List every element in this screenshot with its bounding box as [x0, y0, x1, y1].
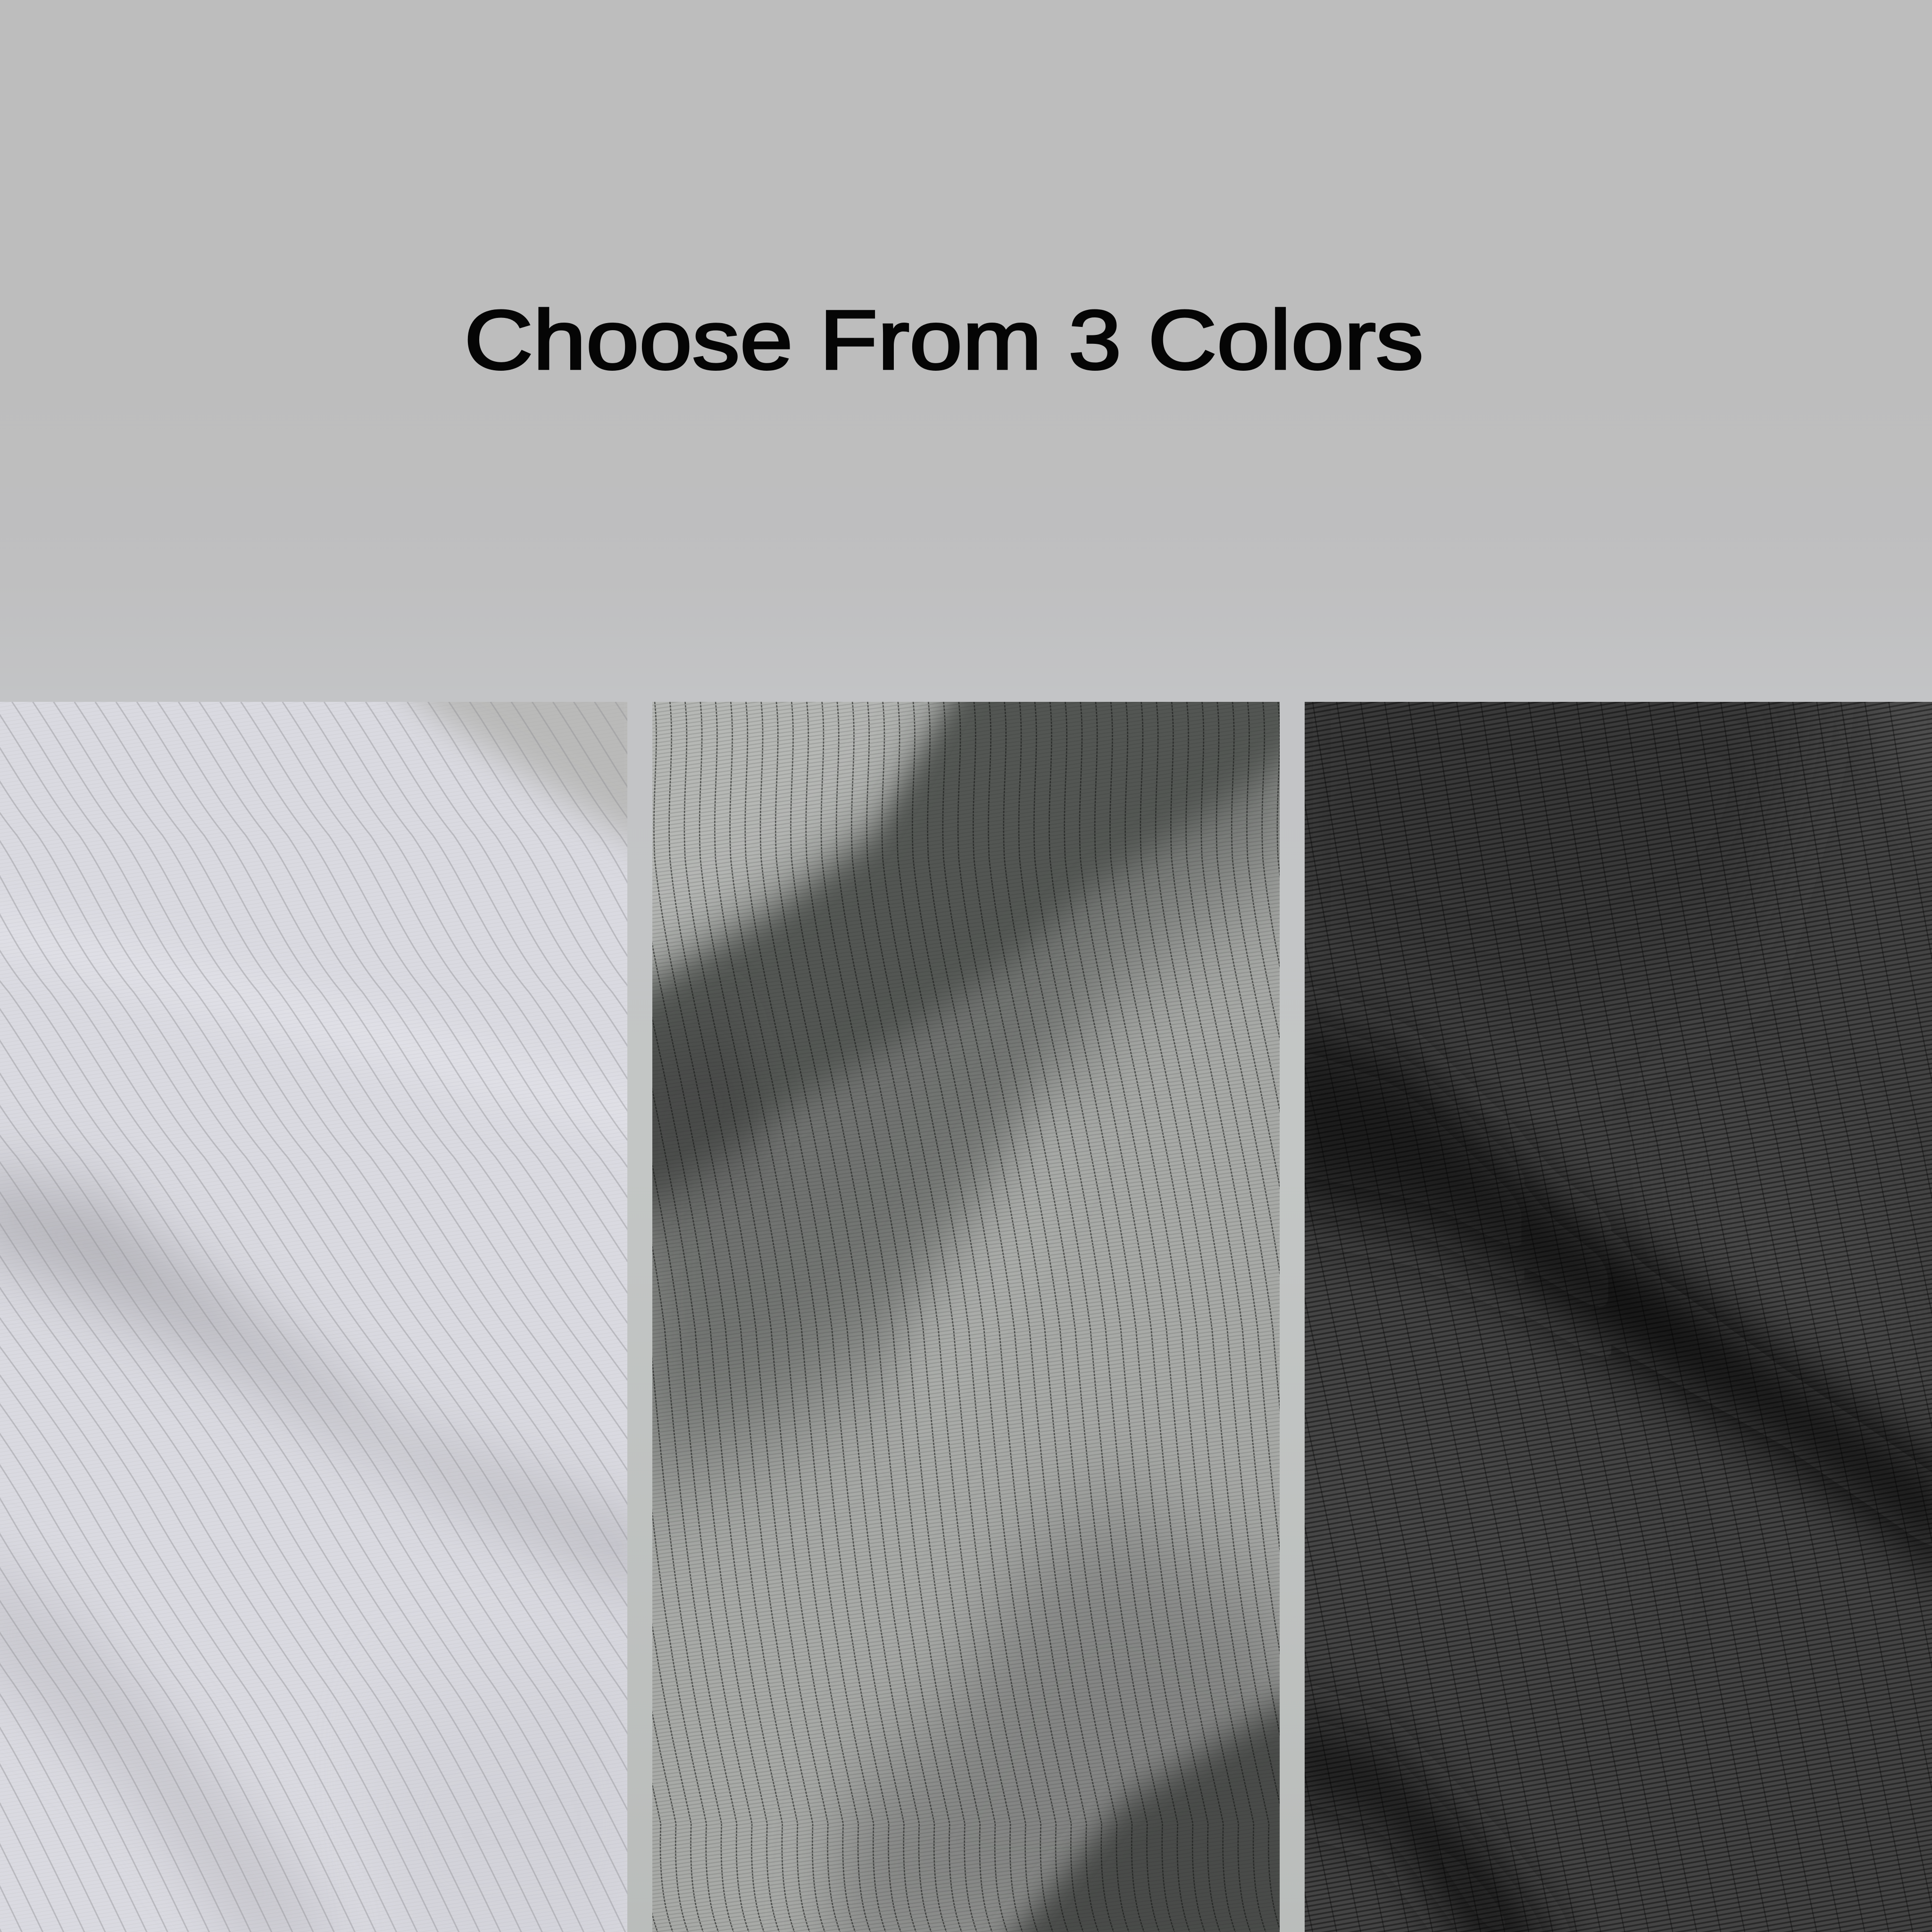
title: Choose From 3 Colors: [464, 293, 1424, 387]
panel: gray fabric swatch: [395, 655, 1524, 1932]
panel: white fabric swatch: [0, 655, 1607, 1932]
panel: charcoal fabric swatch: [1049, 655, 1932, 1932]
